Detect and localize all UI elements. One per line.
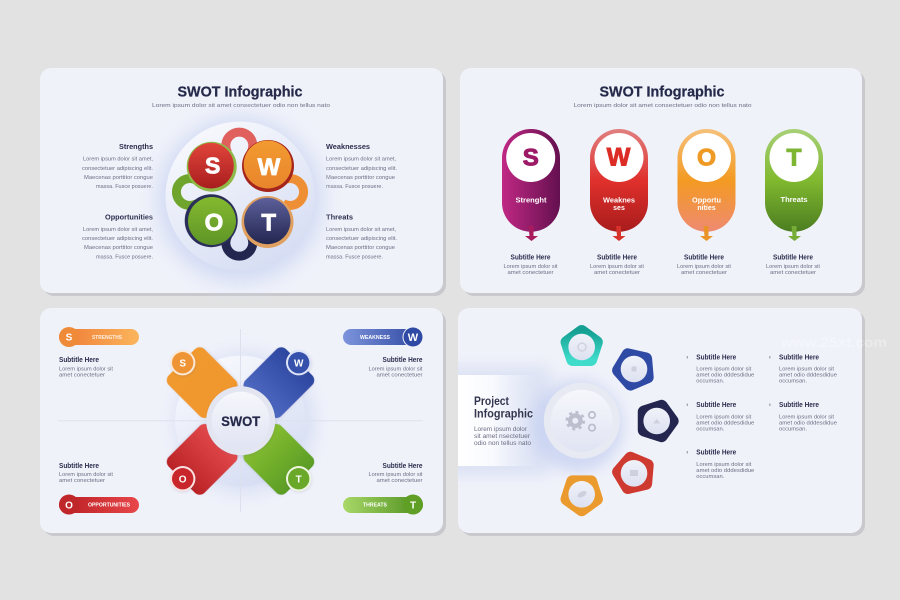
pill: Weaknesses: Weaknes	[603, 198, 635, 204]
text block: subtitle 4: Subtitle Here	[773, 254, 813, 262]
petal: W	[241, 344, 317, 421]
text block: item 2: amet odio dddesdidue	[779, 373, 837, 379]
text block: subtitle 4	[766, 254, 820, 276]
text block: item 2: Subtitle Here	[779, 355, 819, 362]
O circle: O	[205, 210, 223, 237]
pill: Strenght	[502, 129, 560, 241]
text block: item 2	[770, 355, 837, 385]
text block: Threats: consectetuer adipiscing elit.	[326, 236, 397, 242]
label bar: Strengths	[59, 327, 139, 347]
pill: Opportunities: O	[697, 145, 716, 172]
badge: O	[170, 466, 195, 491]
text block: Strengths: consectetuer adipiscing elit.	[82, 166, 153, 172]
text block: bottom right	[368, 463, 423, 484]
panel: SWOT circle infographic	[40, 68, 446, 296]
text block: project description: sit amet nsectetuer	[474, 433, 531, 440]
text block: top right: amet conectetuer	[376, 372, 423, 378]
text block: item 1	[687, 355, 754, 385]
subtitle: panel 2: Lorem ipsum dolor sit amet consectetuer odio non tellus nato	[574, 103, 752, 109]
pentagon: navy	[643, 406, 673, 436]
label bar: Opportunities: O	[65, 500, 73, 511]
label bar: Opportunities	[59, 494, 139, 514]
text block: subtitle 1	[504, 254, 558, 276]
text block: item 4	[770, 402, 837, 432]
text block: subtitle 3	[677, 254, 731, 276]
text block: top left: amet conectetuer	[59, 372, 105, 378]
text block: item 4: occumsan.	[779, 426, 807, 432]
badge: T: T	[296, 474, 302, 486]
text block: Weaknesses: consectetuer adipiscing elit.	[326, 166, 397, 172]
text block: item 3: Subtitle Here	[696, 402, 736, 409]
text block: Strengths: Strengths	[119, 144, 153, 151]
text block: Weaknesses	[326, 144, 397, 190]
text block: top right	[368, 357, 423, 378]
text block: Threats: massa. Fusce posuere.	[326, 254, 383, 260]
text block: project description: odio non tellus nato	[474, 440, 531, 447]
text block: subtitle 3: Subtitle Here	[684, 254, 724, 262]
text block: item 3: Lorem ipsum dolor sit	[696, 414, 752, 420]
pentagon: red	[614, 453, 656, 495]
text block: Opportunities: consectetuer adipiscing elit.	[82, 236, 153, 242]
pentagon: blue	[614, 347, 656, 389]
S circle: S	[205, 152, 220, 178]
text block: item 1: occumsan.	[696, 379, 725, 385]
badge: O: O	[179, 474, 187, 486]
text block: item 2: Lorem ipsum dolor sit	[779, 367, 834, 373]
label bar: Threats	[343, 494, 423, 514]
label bar: Strengths: STRENGTHS	[92, 335, 123, 341]
pill: Threats	[765, 129, 823, 241]
text block: Opportunities: Opportunities	[105, 214, 153, 222]
text block: top left: Subtitle Here	[59, 357, 99, 364]
text block: subtitle 4: amet conectetuer	[770, 270, 816, 276]
W circle	[242, 140, 294, 192]
text block: Strengths	[82, 144, 153, 190]
text block: subtitle 3: amet conectetuer	[681, 270, 727, 276]
pill: Threats: Threats	[780, 197, 808, 204]
text block: Weaknesses: Maecenas porttitor congue	[326, 175, 395, 181]
petal: O	[164, 421, 240, 498]
badge: S: S	[179, 358, 186, 370]
text block: subtitle 2: Lorem ipsum dolor sit	[590, 264, 644, 270]
petal: T	[241, 421, 317, 498]
text block: Strengths: Maecenas porttitor congue	[84, 175, 153, 181]
text block: Weaknesses: massa. Fusce posuere.	[326, 184, 383, 190]
text block: bottom right: Subtitle Here	[382, 463, 423, 470]
chart: SWOT clover diagram	[158, 118, 322, 282]
text block: bottom left: Lorem ipsum dolor sit	[59, 472, 113, 478]
band and glow	[440, 366, 623, 476]
text block: Strengths: Lorem ipsum dolor sit amet,	[83, 157, 153, 163]
text block: subtitle 1: amet conectetuer	[508, 270, 554, 276]
label bar: Strengths: S	[66, 332, 73, 344]
label bar: Weakness	[343, 326, 424, 348]
text block: item 4: Subtitle Here	[779, 402, 819, 409]
icon: gears	[567, 412, 595, 431]
badge: W	[286, 350, 311, 375]
text block: bottom right: Lorem ipsum dolor sit	[368, 472, 423, 478]
text block: subtitle 1: Subtitle Here	[510, 254, 551, 262]
label bar: Weakness: WEAKNESS	[360, 335, 391, 341]
text block: bottom left: Subtitle Here	[59, 463, 99, 470]
text block: subtitle 2: amet conectetuer	[594, 270, 640, 276]
pill: Weaknesses: W	[607, 144, 631, 172]
text block: Threats: Lorem ipsum dolor sit amet,	[326, 227, 396, 233]
text block: bottom left	[59, 463, 113, 484]
text block: item 3	[687, 402, 754, 432]
heading: panel 2 title: SWOT Infographic	[600, 84, 724, 100]
text block: Threats: Maecenas porttitor congue	[326, 245, 395, 251]
text block: item 1: Subtitle Here	[696, 355, 736, 362]
label bar: Threats: T	[410, 500, 416, 511]
text block: item 3: amet odio dddesdidue	[696, 420, 754, 426]
panel: SWOT pills infographic	[460, 68, 865, 296]
text block: item 5: occumsan.	[696, 474, 725, 480]
text block: item 5: Subtitle Here	[696, 450, 736, 457]
text block: Weaknesses: Weaknesses	[326, 144, 370, 151]
label bar: Opportunities: OPPORTUNITIES	[88, 503, 131, 509]
pill: Weaknesses	[590, 129, 648, 241]
text block: Opportunities: massa. Fusce posuere.	[96, 254, 153, 260]
hub: gears	[544, 383, 620, 459]
T circle: T	[261, 210, 276, 237]
text block: Strengths: massa. Fusce posuere.	[96, 184, 153, 190]
text block: subtitle 2: Subtitle Here	[597, 254, 637, 262]
text block: top left	[59, 357, 113, 378]
chart: SWOT petal diagram	[58, 329, 423, 512]
text block: subtitle 4: Lorem ipsum dolor sit	[766, 264, 820, 270]
text block: subtitle 1: Lorem ipsum dolor sit	[504, 264, 558, 270]
heading: Project Infographic: Project	[474, 396, 509, 408]
badge: S	[170, 350, 195, 375]
text block: item 5: Lorem ipsum dolor sit	[696, 462, 752, 468]
pill: Strenght: Strenght	[516, 198, 547, 204]
watermark: www.25xt.com	[780, 334, 887, 350]
pill: Opportunities: Opportu	[692, 198, 721, 204]
pill: Opportunities	[678, 129, 736, 241]
hub: SWOT	[206, 386, 275, 455]
text block: top left: Lorem ipsum dolor sit	[59, 366, 113, 372]
W circle: W	[258, 154, 281, 181]
panel: project infographic	[440, 308, 865, 536]
text block: bottom left: amet conectetuer	[59, 478, 105, 484]
label bar: Weakness: W	[408, 332, 419, 344]
text block: Opportunities: Maecenas porttitor congue	[84, 245, 153, 251]
badge: T	[286, 466, 311, 491]
text block: item 3: occumsan.	[696, 426, 725, 432]
text block: Threats: Threats	[326, 214, 353, 222]
T circle	[242, 196, 294, 248]
hub: SWOT: SWOT	[221, 413, 261, 429]
O circle	[185, 194, 238, 247]
text block: item 4: Lorem ipsum dolor sit	[779, 414, 834, 420]
text block: subtitle 3: Lorem ipsum dolor sit	[677, 264, 731, 270]
text block: project description	[474, 426, 531, 447]
text block: item 1: amet odio dddesdidue	[696, 373, 754, 379]
text block: item 4: amet odio dddesdidue	[779, 420, 837, 426]
pill: Weaknesses: ses	[613, 205, 625, 212]
text block: Opportunities	[82, 214, 153, 260]
panel: SWOT cross infographic	[40, 308, 446, 536]
petal: S	[164, 344, 240, 421]
text block: top right: Subtitle Here	[382, 357, 423, 364]
pentagon: teal	[566, 331, 597, 360]
badge: W: W	[294, 358, 304, 370]
pentagon: orange	[566, 481, 597, 510]
pill: Threats: T	[787, 145, 802, 172]
pill: Opportunities: nities	[697, 205, 716, 212]
text block: item 2: occumsan.	[779, 379, 807, 385]
S circle	[187, 142, 237, 192]
subtitle: panel 1: Lorem ipsum dolor sit amet consectetuer odio non tellus nato	[152, 103, 330, 109]
label bar: Threats: THREATS	[363, 503, 388, 509]
text block: item 5: amet odio dddesdidue	[696, 468, 754, 474]
text block: subtitle 2	[590, 254, 644, 276]
heading: Project Infographic: Infographic	[474, 408, 534, 420]
heading: Project Infographic	[474, 396, 534, 420]
text block: Weaknesses: Lorem ipsum dolor sit amet,	[326, 157, 396, 163]
text block: item 1: Lorem ipsum dolor sit	[696, 367, 752, 373]
text block: project description: Lorem ipsum dolor	[474, 426, 528, 433]
pill: Strenght: S	[523, 145, 539, 172]
text block: top right: Lorem ipsum dolor sit	[368, 366, 423, 372]
text block: Opportunities: Lorem ipsum dolor sit amet,	[83, 227, 153, 233]
text block: item 5	[687, 450, 754, 480]
text block: bottom right: amet conectetuer	[376, 478, 423, 484]
heading: panel 1 title: SWOT Infographic	[178, 84, 302, 100]
text block: Threats	[326, 214, 397, 260]
